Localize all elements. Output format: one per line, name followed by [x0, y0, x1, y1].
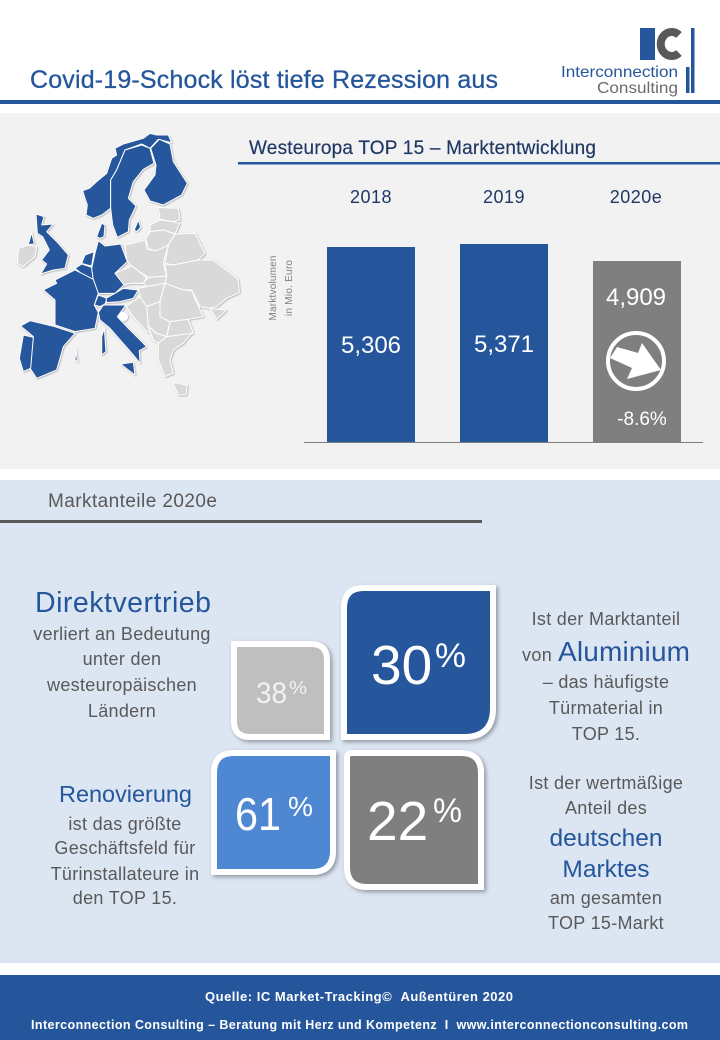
bar 2018: 5,306: [341, 332, 401, 359]
text block: Aluminium: – das häufigste: [543, 672, 669, 692]
text block: Direktvertrieb: [33, 587, 211, 721]
map of Europe: [17, 133, 239, 395]
footer: Interconnection Consulting – Beratung mit Herz und Kompetenz I www.interconnectionconsulting.com: [31, 1018, 688, 1032]
text block: Renovierung: den TOP 15.: [73, 888, 177, 908]
text block: Aluminium: Aluminium: [558, 636, 690, 667]
text block: Renovierung: Renovierung: [59, 781, 192, 807]
text block: Aluminium: TOP 15.: [572, 724, 640, 744]
text block: Direktvertrieb: Direktvertrieb: [35, 587, 211, 619]
section heading: Marktanteile 2020e: [48, 491, 217, 512]
text block: deutscher Markt: Marktes: [562, 856, 650, 883]
text block: Aluminium: [522, 609, 690, 744]
bar 2019: [460, 244, 548, 442]
footer: [0, 975, 720, 1040]
panel: market development: [0, 113, 720, 469]
tile: 38%: %: [289, 678, 307, 698]
text block: Renovierung: ist das größte: [68, 814, 182, 834]
panel: market shares: [0, 480, 720, 963]
year labels: 2018: [350, 187, 392, 207]
tile: 61%: [214, 753, 333, 872]
bar 2020e: 4,909: [606, 284, 666, 311]
tile: 30%: [344, 588, 493, 737]
text block: deutscher Markt: deutschen: [549, 825, 663, 852]
tile: 22%: %: [433, 792, 462, 830]
axis label: Marktvolumen: [268, 256, 279, 320]
text block: deutscher Markt: Anteil des: [565, 798, 647, 818]
tile: 61%: %: [288, 791, 313, 822]
logo: Interconnection Consulting: Consulting: [597, 80, 678, 97]
text block: Direktvertrieb: westeuropäischen: [46, 675, 197, 695]
bar 2020e: [593, 261, 681, 442]
text block: Direktvertrieb: verliert an Bedeutung: [33, 624, 211, 644]
text block: Aluminium: Ist der Marktanteil: [532, 609, 680, 629]
bar 2019: 5,371: [474, 331, 534, 358]
text block: Direktvertrieb: Ländern: [88, 701, 156, 721]
text block: Aluminium: von: [522, 645, 552, 665]
text block: Renovierung: Geschäftsfeld für: [54, 838, 196, 858]
year labels: 2019: [483, 187, 525, 207]
bar 2020e: -8.6%: [617, 409, 667, 430]
text block: deutscher Markt: am gesamten: [550, 888, 662, 908]
tile: 61%: 61: [235, 788, 281, 840]
bar 2018: [327, 247, 415, 442]
tile: 22%: 22: [367, 790, 428, 852]
tile: 30%: %: [435, 637, 466, 675]
footer: Quelle: IC Market-Tracking© Außentüren 2020: [205, 989, 513, 1004]
bar chart: [268, 187, 703, 443]
title: Covid-19-Schock löst tiefe Rezession aus: [30, 66, 498, 94]
text block: Aluminium: Türmaterial in: [549, 698, 663, 718]
bar chart: in Mio. Euro: [284, 260, 295, 316]
year labels: [350, 187, 662, 207]
tile: 30%: 30: [371, 634, 432, 696]
text block: Renovierung: Türinstallateure in: [51, 864, 199, 884]
text block: deutscher Markt: TOP 15-Markt: [548, 913, 664, 933]
icon: down arrow: [608, 333, 664, 389]
year labels: 2020e: [610, 187, 662, 207]
chart heading: Westeuropa TOP 15 – Marktentwicklung: [249, 138, 596, 159]
logo: Interconnection Consulting: Interconnection: [561, 64, 678, 81]
tile: 38%: [234, 644, 327, 737]
tile: 38%: 38: [256, 677, 287, 710]
text block: deutscher Markt: [529, 773, 683, 933]
text block: Direktvertrieb: unter den: [83, 649, 161, 669]
tile: 22%: [347, 753, 481, 887]
text block: deutscher Markt: Ist der wertmäßige: [529, 773, 683, 793]
logo: Interconnection Consulting: [561, 28, 694, 97]
text block: Renovierung: [51, 781, 199, 908]
